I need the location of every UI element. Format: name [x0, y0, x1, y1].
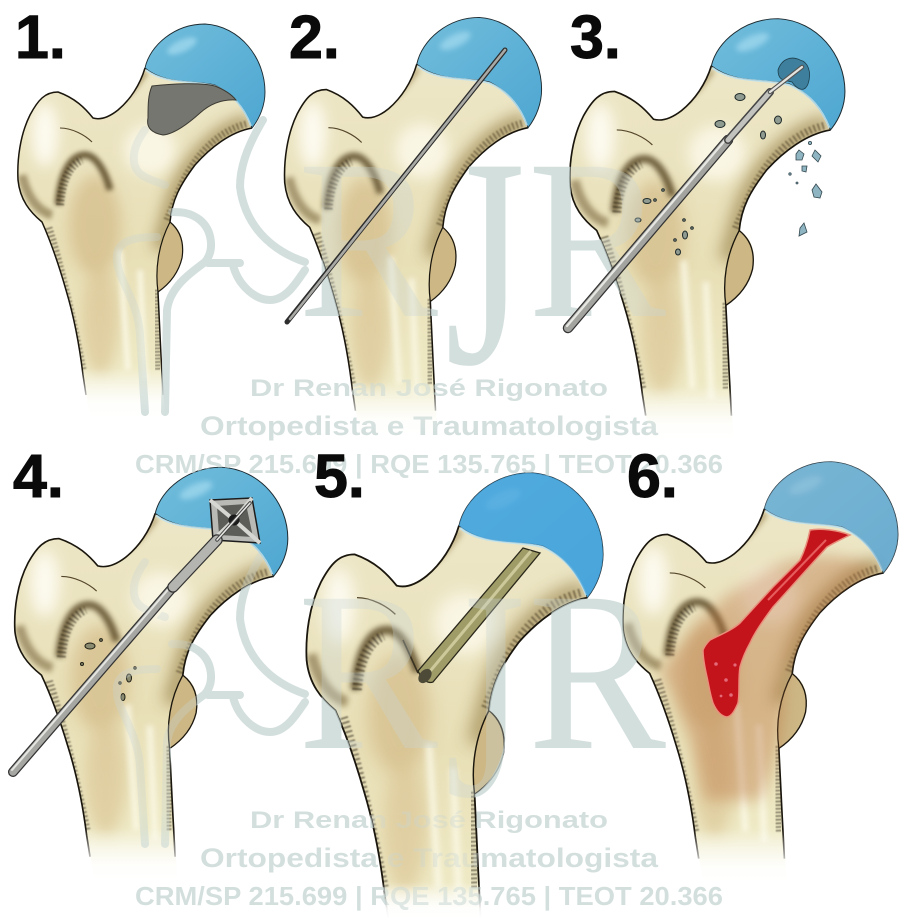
watermark doctor name: Dr Renan José Rigonato	[250, 375, 608, 402]
bone debris	[789, 141, 822, 236]
watermark monogram RJR: J	[445, 528, 525, 860]
watermark doctor name: Dr Renan José Rigonato	[250, 807, 608, 834]
red graft	[703, 529, 850, 717]
panel 5: femur with drilled tunnel	[306, 473, 603, 920]
core tunnel	[403, 548, 540, 686]
watermark monogram RJR: R	[528, 114, 666, 366]
graft highlights	[714, 540, 826, 697]
watermark registration numbers: CRM/SP 215.699 | RQE 135.765 | TEOT 20.366	[135, 449, 723, 479]
watermark monogram RJR: R	[298, 114, 438, 366]
watermark registration numbers: CRM/SP 215.699 | RQE 135.765 | TEOT 20.366	[135, 881, 723, 911]
bone holes	[635, 94, 782, 255]
step number 1: 1.	[15, 3, 66, 71]
watermark monogram RJR: J	[445, 96, 525, 428]
drill bit	[567, 67, 802, 328]
step number 5: 5.	[314, 442, 365, 510]
reddish tint over bone	[660, 556, 880, 800]
guide wire	[287, 50, 505, 322]
step number 6: 6.	[627, 442, 678, 510]
pale femoral head tint	[764, 462, 898, 573]
watermark monogram RJR: R	[528, 546, 666, 798]
watermark specialty: Ortopedista e Traumatologista	[200, 411, 659, 441]
step number 2: 2.	[289, 3, 340, 71]
panel 4: femur with expandable reamer	[12, 467, 288, 881]
vivid femoral head tint	[459, 473, 603, 598]
panel 6: femur with bone graft filling the tunnel	[623, 462, 898, 883]
necrotic lesion	[148, 84, 236, 135]
shaft bottom fade	[370, 882, 495, 920]
panel 2: femur with guide wire	[285, 17, 542, 435]
watermarks	[117, 96, 723, 911]
watermark monogram RJR: R	[298, 546, 438, 798]
watermark: upper	[117, 96, 723, 479]
watermark: lower	[117, 528, 723, 911]
watermark monogram RJR	[304, 166, 666, 366]
watermark specialty: Ortopedista e Traumatologista	[200, 843, 659, 873]
drill entry crater in femoral head	[778, 58, 810, 89]
step number 4: 4.	[13, 442, 64, 510]
reamer head	[210, 498, 260, 543]
panel 3: femur with drill and debris	[567, 19, 845, 440]
reamer shaft	[12, 503, 250, 772]
watermark monogram RJR	[304, 598, 666, 798]
bone holes	[80, 639, 136, 700]
step number 3: 3.	[570, 3, 621, 71]
watermark hip icon	[117, 552, 305, 844]
watermark hip icon	[117, 120, 305, 412]
panel 1: femur with necrotic lesion	[18, 24, 265, 418]
